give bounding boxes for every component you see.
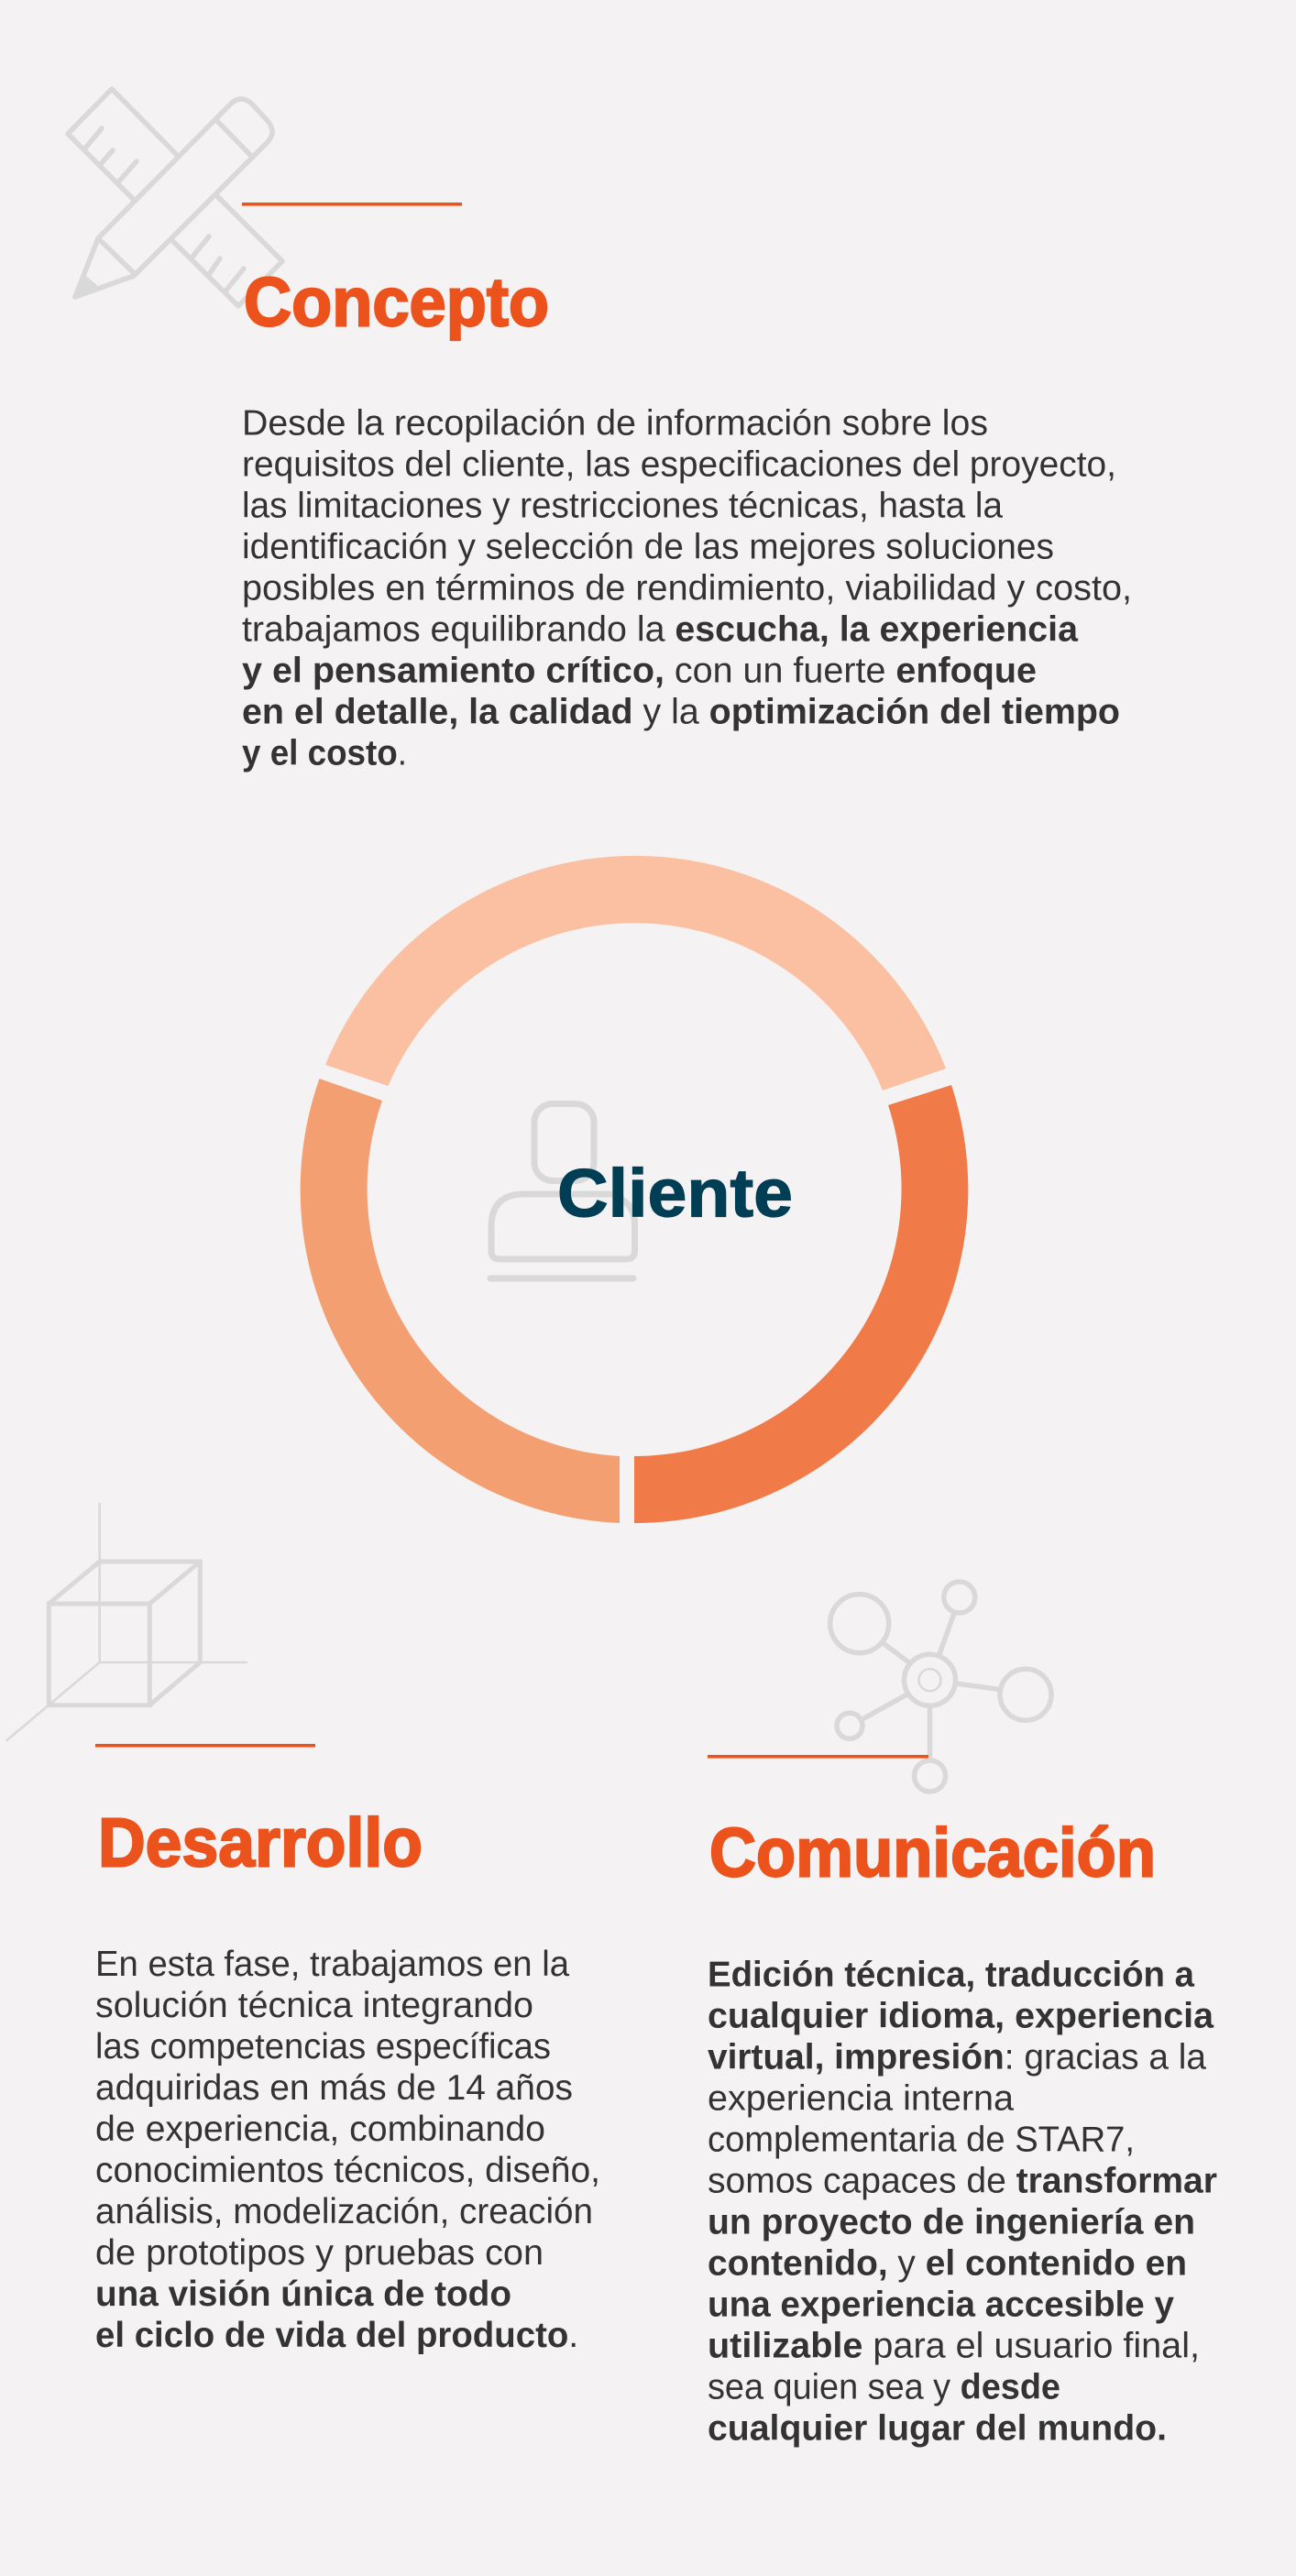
text block: comunicacion description: una experiencia accesible y bbox=[708, 2286, 1175, 2324]
panel: comunicacion bbox=[708, 1582, 1217, 2449]
text block: desarrollo description: En esta fase, trabajamos en la bbox=[95, 1945, 570, 1984]
text block: concepto description: y el costo. bbox=[242, 733, 407, 773]
text block: concepto description: en el detalle, la calidad y la optimización del tiempo bbox=[242, 692, 1120, 731]
label: Cliente: Cliente bbox=[557, 1155, 793, 1232]
text block: concepto description: trabajamos equilibrando la escucha, la experiencia bbox=[242, 609, 1079, 649]
text block: concepto description: identificación y selección de las mejores soluciones bbox=[242, 527, 1054, 566]
text block: desarrollo description: análisis, modelización, creación bbox=[95, 2192, 593, 2231]
icon: wireframe cube bbox=[7, 1504, 247, 1740]
text block: comunicacion description: utilizable para el usuario final, bbox=[708, 2326, 1200, 2366]
text block: comunicacion description: un proyecto de ingeniería en bbox=[708, 2203, 1195, 2242]
icon: person bbox=[490, 1103, 634, 1278]
heading: Desarrollo: Desarrollo bbox=[98, 1803, 423, 1880]
text block: desarrollo description: el ciclo de vida del producto. bbox=[95, 2316, 578, 2355]
text block: desarrollo description: adquiridas en más de 14 años bbox=[95, 2068, 573, 2108]
text block: desarrollo description: de prototipos y pruebas con bbox=[95, 2233, 544, 2273]
text block: desarrollo description: una visión única de todo bbox=[95, 2275, 511, 2314]
text block: comunicacion description: Edición técnica, traducción a bbox=[708, 1956, 1195, 1994]
accent line bbox=[708, 1755, 928, 1759]
text block: comunicacion description: cualquier lugar del mundo. bbox=[708, 2408, 1167, 2449]
panel: cliente ring bbox=[301, 856, 968, 1523]
text block: desarrollo description: las competencias específicas bbox=[95, 2027, 551, 2066]
text block: comunicacion description: somos capaces de transformar bbox=[708, 2161, 1217, 2201]
panel: concepto bbox=[68, 89, 1132, 773]
text block: concepto description: Desde la recopilación de información sobre los bbox=[242, 403, 988, 443]
icon: network nodes bbox=[830, 1582, 1051, 1792]
heading: Comunicación: Comunicación bbox=[709, 1814, 1156, 1891]
text block: desarrollo description: de experiencia, combinando bbox=[95, 2110, 545, 2149]
text block: desarrollo description: conocimientos técnicos, diseño, bbox=[95, 2151, 600, 2190]
text block: comunicacion description: virtual, impresión: gracias a la bbox=[708, 2038, 1207, 2077]
panel: desarrollo bbox=[7, 1504, 600, 2355]
text block: comunicacion description: cualquier idioma, experiencia bbox=[708, 1996, 1214, 2036]
text block: comunicacion description bbox=[708, 1956, 1217, 2449]
text block: comunicacion description: experiencia interna bbox=[708, 2078, 1015, 2119]
ring segment: top bbox=[325, 856, 946, 1091]
ring segment: left bbox=[301, 1079, 620, 1523]
text block: concepto description: y el pensamiento crítico, con un fuerte enfoque bbox=[242, 651, 1037, 690]
text block: comunicacion description: contenido, y el contenido en bbox=[708, 2243, 1187, 2284]
ring segment: right bbox=[634, 1085, 968, 1523]
text block: comunicacion description: complementaria de STAR7, bbox=[708, 2121, 1135, 2159]
text block: concepto description bbox=[242, 403, 1132, 773]
text block: desarrollo description bbox=[95, 1945, 600, 2355]
text block: concepto description: las limitaciones y restricciones técnicas, hasta la bbox=[242, 486, 1004, 525]
text block: comunicacion description: sea quien sea y desde bbox=[708, 2368, 1060, 2406]
accent line bbox=[95, 1744, 315, 1748]
heading: Concepto: Concepto bbox=[244, 264, 549, 341]
icon: ruler and pencil bbox=[68, 89, 282, 306]
text block: concepto description: posibles en términos de rendimiento, viabilidad y costo, bbox=[242, 568, 1132, 608]
text block: concepto description: requisitos del cliente, las especificaciones del proyecto, bbox=[242, 444, 1116, 484]
text block: desarrollo description: solución técnica integrando bbox=[95, 1986, 533, 2025]
accent line bbox=[242, 203, 462, 206]
